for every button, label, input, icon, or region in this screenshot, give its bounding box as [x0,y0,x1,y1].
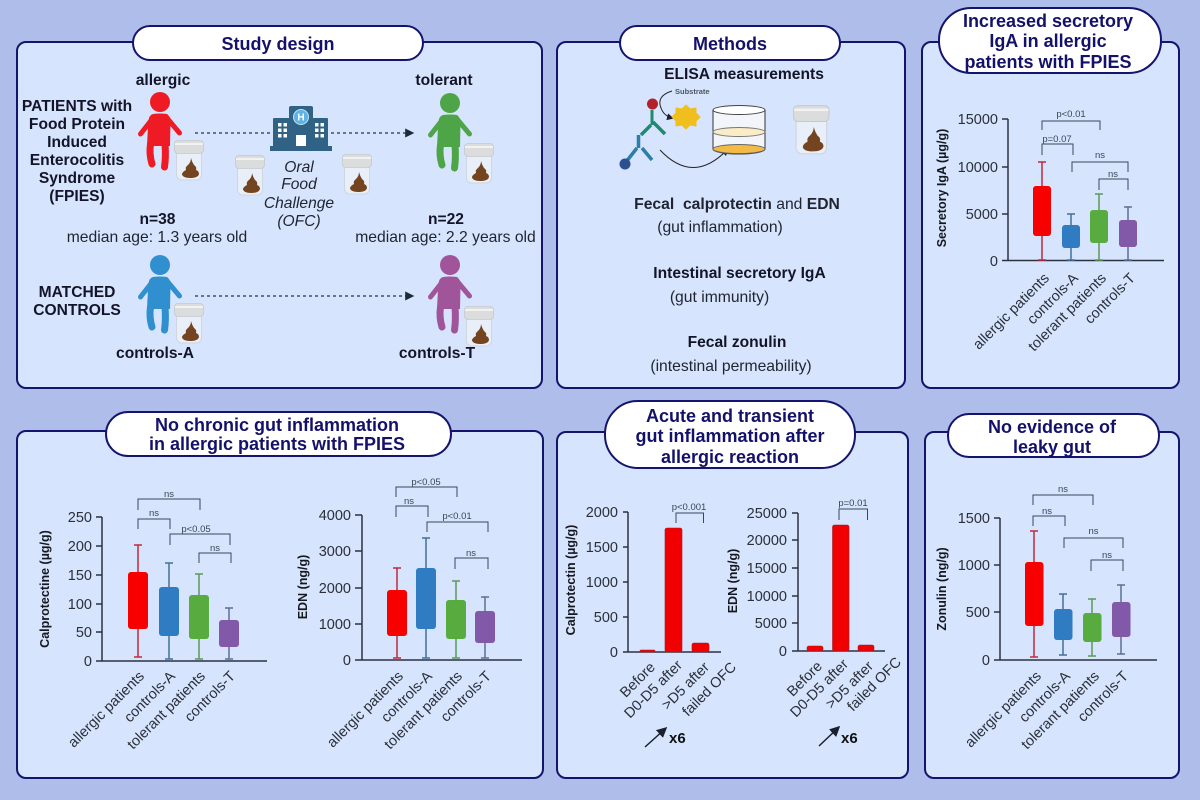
icon: ELISA antibody and beaker: Substrate [675,87,710,96]
arrow: allergic to hospital [195,132,274,134]
text: oral food challenge: Food [281,176,318,193]
y axis title: Calprotectin (µg/g) [564,525,578,635]
x axis labels [970,270,1139,355]
x axis labels: controls-T [438,668,495,725]
significance brackets: ns [164,489,174,500]
y axis: 15000 [958,112,998,128]
significance brackets: p<0.05 [181,524,211,535]
text: allergic sample size: median age: 1.3 years old [67,229,247,246]
text: matched controls [33,284,121,319]
chart: calprotectin bars [564,502,740,747]
label: controls-T: controls-T [399,345,476,362]
y axis: 0 [779,644,787,660]
x axis labels: controls-A [378,668,436,726]
icon: ELISA antibody and beaker [620,87,765,170]
significance brackets: p=0.07 [1042,134,1072,145]
y axis [747,506,885,660]
y axis: 0 [84,654,92,670]
y axis title: Calprotectine (µg/g) [38,530,52,648]
heading: increased secretory IgA [939,8,1161,73]
y axis: 15000 [747,561,787,577]
text: zonulin: (intestinal permeability) [650,358,812,375]
y axis: 20000 [747,533,787,549]
box: controls-A [416,538,436,658]
y axis: 200 [68,539,92,555]
y axis: 2000 [586,505,618,521]
heading: acute and transient gut inflammation [605,401,855,468]
x axis labels: controls-A [1024,270,1082,328]
x axis labels [962,668,1132,753]
y axis [586,505,721,661]
y axis: 0 [610,645,618,661]
x axis labels: Before [617,660,659,701]
significance brackets [1033,484,1123,571]
significance brackets: ns [1042,506,1052,517]
significance brackets: ns [1108,169,1118,180]
bar: before [807,646,823,651]
label: controls-A: controls-A [116,345,194,362]
heading: no chronic gut inflammation: No chronic gut inflammation [155,415,399,435]
heading: no evidence of leaky gut: leaky gut [1013,437,1091,457]
y axis: 4000 [319,508,351,524]
x axis labels [784,655,905,721]
text: tolerant sample size: median age: 2.2 years old [355,229,536,246]
panel: secretory IgA [922,8,1179,388]
text: patients with FPIES: Food Protein [29,116,125,133]
y axis: 3000 [319,544,351,560]
text: secretory IgA [653,265,826,306]
text: secretory IgA: Intestinal secretory IgA [653,265,826,282]
text: matched controls: CONTROLS [33,302,121,319]
y axis: 5000 [755,616,787,632]
y axis: 1000 [319,617,351,633]
box: allergic patients [1025,531,1044,657]
box: controls-T [475,597,495,658]
box: tolerant patients [446,581,466,658]
significance brackets: p<0.01 [442,511,472,522]
y axis: 500 [594,610,618,626]
text: patients with FPIES: PATIENTS with [22,98,132,115]
y axis: 1500 [586,540,618,556]
icon: hospital: H [297,112,305,124]
x axis labels: >D5 after [659,659,713,713]
y axis: 5000 [966,207,998,223]
chart: zonulin box plot [935,484,1157,753]
heading: no evidence of leaky gut [948,414,1159,457]
y axis: 250 [68,510,92,526]
x axis labels: controls-T [1075,668,1132,725]
x axis labels: D0-D5 after [622,657,686,722]
heading: no chronic gut inflammation: in allergic patients with FPIES [149,434,405,454]
x axis labels: tolerant patients [1026,271,1110,355]
callout: six-fold increase: x6 [669,730,686,747]
y axis: 0 [982,653,990,669]
significance brackets: ns [149,508,159,519]
panel: methods [557,26,905,388]
text: secretory IgA: (gut immunity) [670,289,769,306]
y axis: 1000 [586,575,618,591]
significance brackets [138,489,231,563]
bar: before [640,650,655,652]
panel: study design [17,26,542,388]
text: patients with FPIES: (FPIES) [49,188,105,205]
significance brackets [1042,109,1128,190]
text: oral food challenge: Oral [284,159,314,176]
heading: increased secretory IgA: IgA in allergic [989,31,1107,51]
box: controls-T [219,608,239,659]
y axis [958,511,1157,669]
box: allergic patients [387,568,407,658]
significance bracket: p<0.001 [672,502,706,513]
significance brackets [396,477,488,569]
icon: tolerant child with sample [430,93,494,183]
bar: D0-D5 after [832,525,849,651]
x axis labels [617,657,740,722]
y axis: 0 [343,653,351,669]
x axis labels: failed OFC [845,655,905,715]
box: controls-A [159,563,179,659]
x axis labels: controls-A [121,668,179,726]
y axis: 2000 [319,581,351,597]
bar: more than D5 after [692,643,709,652]
icon: sample before challenge [236,156,264,195]
text: calprotectin and EDN [634,196,840,236]
callout: six-fold increase [819,728,858,747]
text: oral food challenge [264,159,334,230]
text: calprotectin and EDN: (gut inflammation) [657,219,783,236]
text: allergic sample size [67,211,247,246]
y axis title: EDN (ng/g) [296,555,310,619]
callout: six-fold increase [645,729,686,747]
y axis: 25000 [747,506,787,522]
heading: methods: Methods [693,34,767,54]
y axis [958,112,1164,270]
significance brackets: ns [1088,526,1099,537]
y axis: 150 [68,568,92,584]
significance brackets: ns [1095,150,1105,161]
bar: D0-D5 after [665,528,682,652]
x axis labels: tolerant patients [382,669,466,753]
x axis labels: allergic patients [970,271,1053,353]
y axis: 0 [990,254,998,270]
heading: methods [620,26,840,60]
y axis: 100 [68,597,92,613]
text: patients with FPIES: Syndrome [39,170,115,187]
callout: six-fold increase: x6 [841,730,858,747]
text: matched controls: MATCHED [39,284,115,301]
label: allergic: allergic [136,72,191,89]
heading: acute and transient gut inflammation: Acute and transient [646,406,814,426]
text: zonulin: Fecal zonulin [688,334,786,351]
panel: zonulin [925,414,1179,778]
text: calprotectin and EDN: Fecal calprotectin and EDN [634,196,840,213]
icon: sample after challenge [342,154,372,194]
significance brackets: ns [1102,550,1112,561]
x axis labels: allergic patients [324,669,407,751]
text: tolerant sample size: n=22 [428,211,464,228]
box: allergic patients [128,545,148,657]
panel: acute inflammation [557,401,908,778]
x axis labels: allergic patients [65,669,148,751]
chart: calprotectine box plot [38,489,267,753]
box: controls-T [1119,207,1137,260]
icon: allergic child with sample [140,92,204,180]
x axis labels: allergic patients [962,669,1045,751]
bar: more than D5 after [858,645,874,651]
icon: hospital [270,106,332,151]
text: tolerant sample size [355,211,536,246]
significance brackets: ns [466,548,476,559]
x axis labels: tolerant patients [1019,669,1103,753]
text: oral food challenge: Challenge [264,195,334,212]
text: patients with FPIES: Induced [47,134,107,151]
x axis labels: tolerant patients [125,669,209,753]
heading: increased secretory IgA: patients with FPIES [964,52,1132,72]
y axis: 10000 [747,589,787,605]
text: allergic sample size: n=38 [140,211,176,228]
significance brackets: ns [210,543,220,554]
x axis labels: D0-D5 after [788,656,852,721]
x axis labels: controls-T [1082,270,1139,327]
x axis labels: controls-T [182,668,239,725]
significance bracket: p=0.01 [838,498,868,509]
icon: control child A with sample [140,255,204,343]
box: allergic patients [1033,162,1051,260]
chart: EDN box plot [296,477,522,753]
x axis labels: failed OFC [680,660,740,720]
heading: no evidence of leaky gut: No evidence of [988,417,1117,437]
y axis: 10000 [958,160,998,176]
heading: no chronic gut inflammation [106,412,451,456]
significance brackets: ns [404,496,414,507]
y axis: 1500 [958,511,990,527]
y axis title: Zonulin (ng/g) [935,547,949,631]
significance bracket [838,498,868,520]
arrow: controls-A to controls-T [195,295,413,297]
heading: ELISA measurements: ELISA measurements [664,66,824,83]
heading: increased secretory IgA: Increased secretory [963,11,1133,31]
box: tolerant patients [189,574,209,659]
heading: acute and transient gut inflammation: allergic reaction [661,447,799,467]
chart: EDN bars [726,498,905,747]
significance brackets: p<0.01 [1056,109,1086,120]
text: oral food challenge: (OFC) [277,213,321,230]
chart: secretory IgA box plot [935,109,1164,355]
arrow: hospital to tolerant [331,132,413,134]
box: controls-A [1062,214,1080,260]
x axis labels: >D5 after [823,658,877,712]
y axis [319,508,522,669]
significance brackets: p<0.05 [411,477,441,488]
x axis labels [324,668,495,753]
box: tolerant patients [1090,194,1108,260]
heading: study design [133,26,423,60]
box: controls-A [1054,594,1072,655]
significance bracket [672,502,706,523]
y axis: 500 [966,605,990,621]
x axis labels: controls-A [1016,668,1074,726]
y axis title: EDN (ng/g) [726,549,740,613]
box: tolerant patients [1083,599,1102,656]
x axis labels [65,668,239,753]
text: patients with FPIES: Enterocolitis [30,152,125,169]
y axis title: Secretory IgA (µg/g) [935,129,949,247]
heading: study design: Study design [221,34,335,54]
icon: control child T with sample [430,255,494,346]
significance brackets: ns [1058,484,1068,495]
text: patients with FPIES [22,98,132,205]
y axis: 50 [76,625,92,641]
panel: chronic inflammation [17,412,543,778]
y axis: 1000 [958,558,990,574]
heading: acute and transient gut inflammation: gut inflammation after [635,426,825,446]
x axis labels: Before [784,659,826,700]
icon: stool sample jar [794,106,829,154]
label: tolerant: tolerant [415,72,473,89]
box: controls-T [1112,585,1130,654]
text: zonulin [650,334,812,375]
y axis [68,510,267,670]
